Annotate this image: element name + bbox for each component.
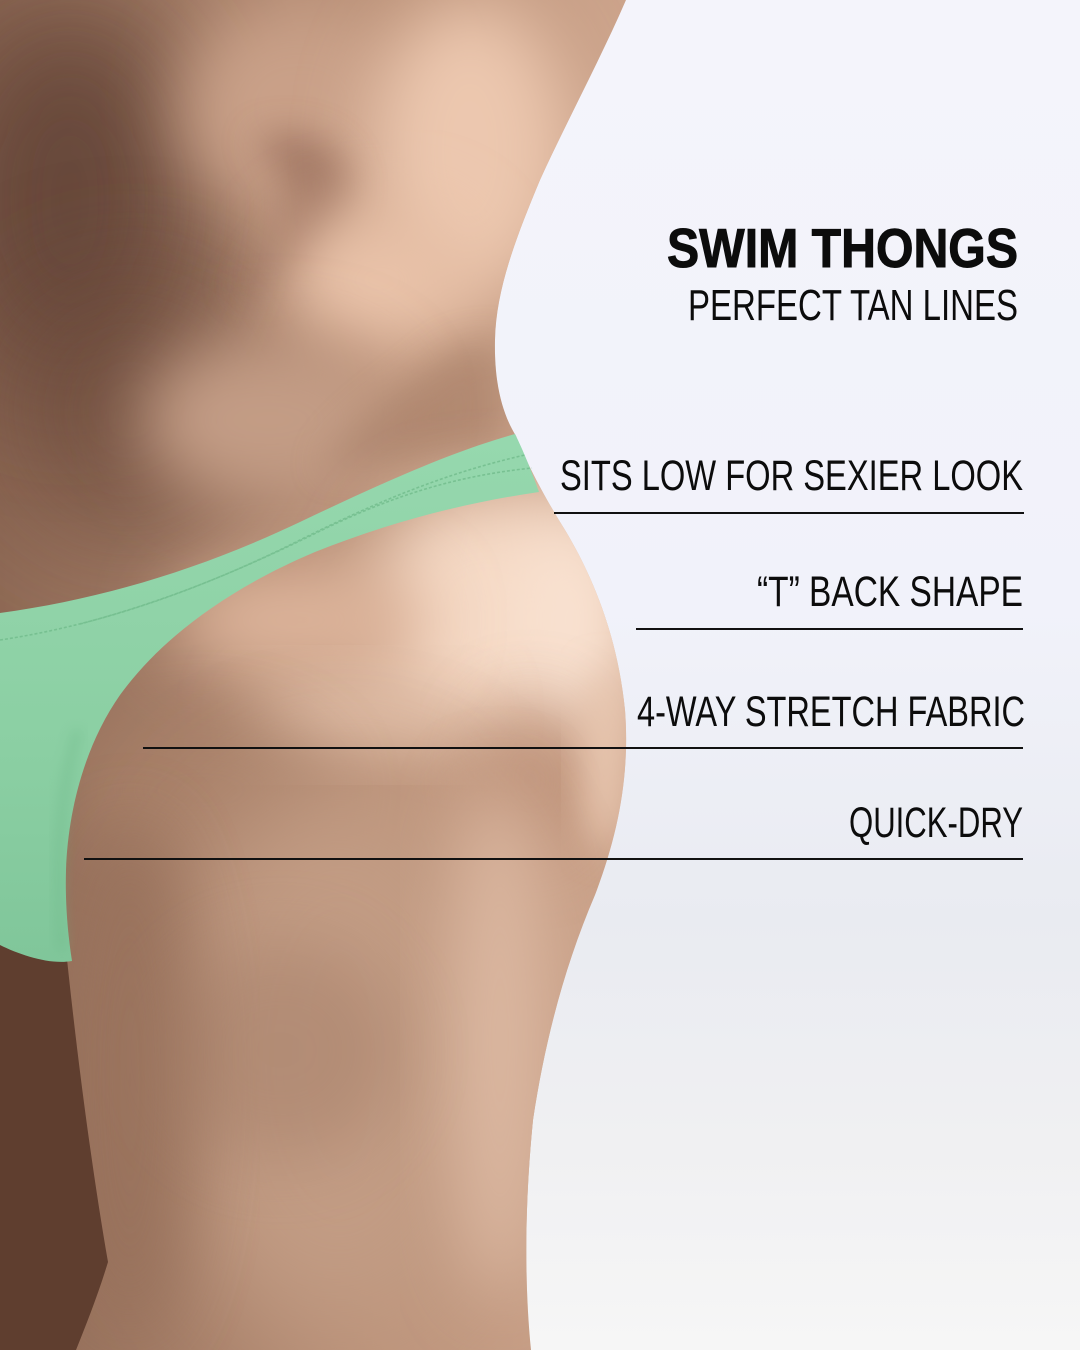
fold shadow — [59, 730, 78, 950]
inner leg shadow — [0, 930, 108, 1350]
torso light and shadow — [0, 0, 570, 540]
waistband stitching — [0, 455, 532, 640]
thigh shading — [195, 778, 566, 1330]
model figure — [0, 0, 626, 1350]
title: SWIM THONGS — [667, 217, 1018, 279]
hip highlight — [156, 464, 626, 848]
title — [667, 217, 1018, 330]
swimwear — [0, 434, 539, 962]
